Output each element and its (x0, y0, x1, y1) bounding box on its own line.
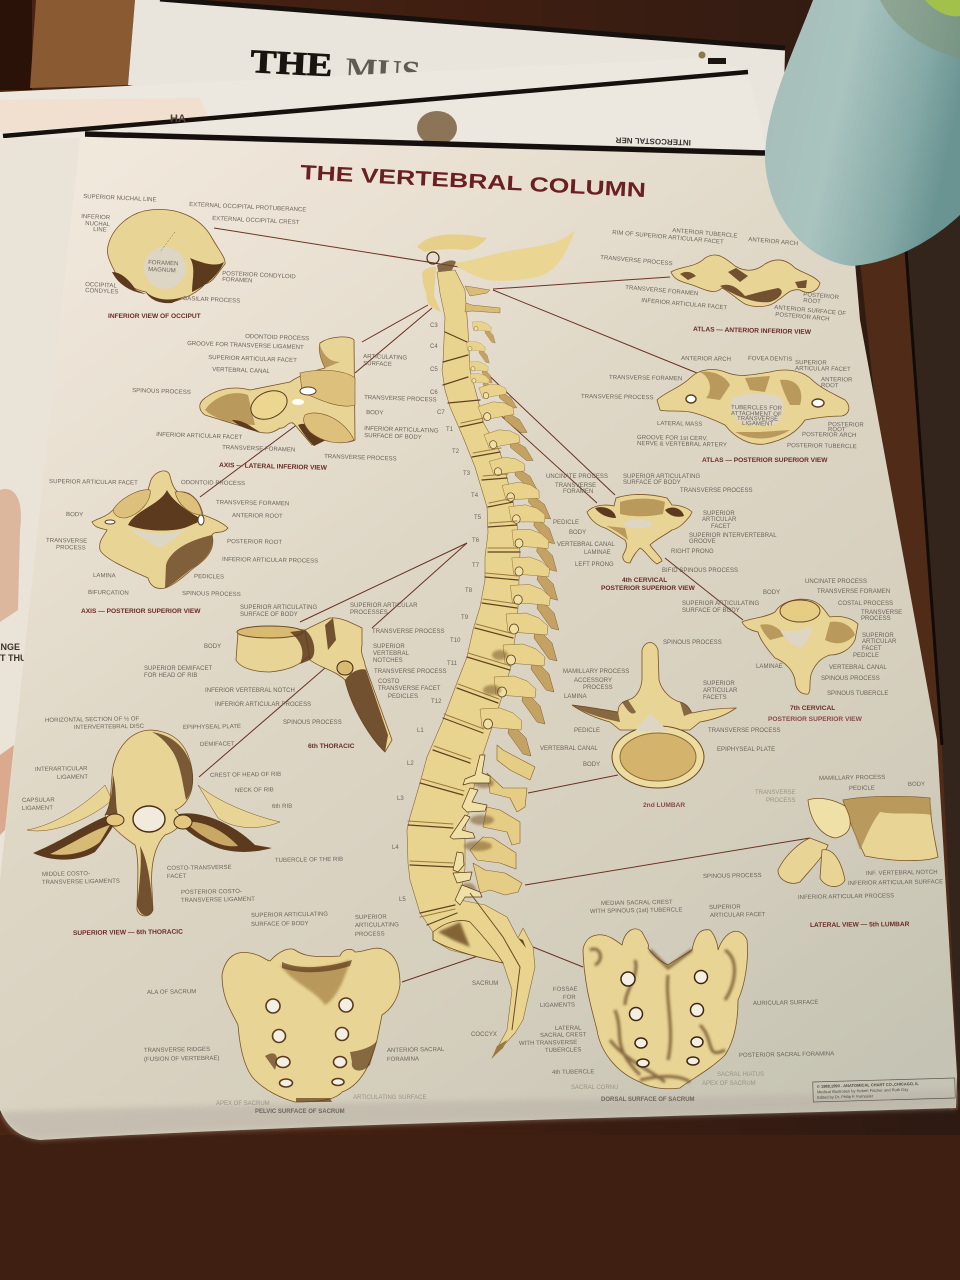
labels: axis posterior: SUPERIOR ARTICULAR FACET (49, 479, 138, 487)
labels: axis lateral: SPINOUS PROCESS (132, 388, 191, 396)
labels: axis lateral: TRANSVERSE FORAMEN (222, 445, 295, 454)
labels: 4th cervical: PEDICLE (553, 520, 579, 526)
labels: 4th cervical: BODY (569, 530, 586, 536)
labels: sacrum pelvic (144, 912, 445, 1063)
labels: axis lateral: VERTEBRAL CANAL (212, 367, 271, 375)
copyright box: Edited by Dr. Philip F. Fornasier (817, 1093, 874, 1100)
labels: axis posterior: PEDICLES (194, 574, 224, 581)
spinal column illustration (407, 230, 575, 1058)
labels: sacrum dorsal: FOR (563, 995, 576, 1001)
labels: sacrum pelvic faint (216, 1095, 426, 1107)
cervical and thoracic processes (465, 286, 559, 756)
labels: sacrum pelvic: ANTERIOR SACRAL (387, 1047, 445, 1054)
labels: occiput: FORAMEN (148, 260, 179, 267)
labels: sacrum pelvic: SURFACE OF BODY (251, 921, 309, 928)
labels: 2nd lumbar: LAMINA (564, 694, 587, 700)
labels: 4th cervical: GROOVE (689, 539, 716, 545)
heading: 7th cervical (768, 705, 863, 723)
labels: 6th thoracic superior: INTERVERTEBRAL DISC (74, 724, 145, 731)
labels: atlas posterior: POSTERIOR ARCH (802, 432, 856, 439)
labels: axis lateral: TRANSVERSE PROCESS (324, 454, 397, 463)
vertebra level labels: T8 (465, 588, 473, 594)
labels: sacrum dorsal faint: APEX OF SACRUM (702, 1081, 756, 1087)
labels: 6th thoracic lateral: FOR HEAD OF RIB (144, 673, 197, 679)
labels: 6th thoracic lateral: SUPERIOR (373, 644, 405, 650)
panel: 6th thoracic lateral (144, 603, 447, 752)
labels: atlas posterior: POSTERIOR (828, 422, 865, 429)
foreground: teal vase (765, 0, 960, 266)
heading: lateral view 5th lumbar: LATERAL VIEW — 5th LUMBAR (810, 921, 910, 929)
labels: 4th cervical: VERTEBRAL CANAL (557, 542, 615, 548)
panel: pelvic surface of sacrum (144, 912, 445, 1115)
heading: 6th thoracic: 6th THORACIC (308, 743, 355, 750)
disc lines (408, 332, 520, 925)
background poster: hand: INTERCOSTAL NER (615, 135, 691, 147)
labels: sacrum pelvic: ARTICULATING (355, 922, 399, 929)
labels: 5th lumbar lateral: INFERIOR ARTICULAR PROCESS (798, 893, 894, 901)
labels: occiput: INFERIOR (81, 214, 111, 221)
labels: occiput: LINE (93, 227, 107, 234)
labels: occiput: FORAMEN (222, 277, 253, 284)
labels: axis lateral: INFERIOR ARTICULATING (364, 426, 439, 435)
labels: axis posterior (46, 479, 318, 598)
labels: 6th thoracic lateral: BODY (204, 644, 221, 650)
labels: 2nd lumbar: FACETS (703, 695, 727, 701)
vertebra level labels: T5 (474, 515, 482, 521)
labels: atlas posterior: NERVE & VERTEBRAL ARTERY (637, 441, 727, 449)
icon: 6th thoracic lateral vertebra (236, 618, 392, 752)
labels: 2nd lumbar: EPIPHYSEAL PLATE (717, 747, 775, 753)
labels: sacrum dorsal: POSTERIOR SACRAL FORAMINA (739, 1051, 834, 1059)
labels: axis posterior: ANTERIOR ROOT (232, 513, 283, 520)
labels: 6th thoracic superior (22, 715, 343, 904)
icon: axis lateral (200, 337, 355, 446)
labels: 7th cervical: LAMINAE (756, 664, 783, 670)
labels: sacrum pelvic: ALA OF SACRUM (147, 989, 196, 996)
labels: axis lateral: INFERIOR ARTICULAR FACET (156, 432, 243, 441)
labels: 7th cervical: UNCINATE PROCESS (805, 579, 867, 585)
background poster: left sheet with hand photo: T THU (0, 653, 26, 663)
vertebra level labels: L2 (407, 761, 414, 767)
background poster: left sheet with hand photo (0, 138, 84, 900)
labels: occiput: OCCIPITAL (85, 282, 118, 290)
labels: atlas anterior: POSTERIOR (803, 292, 840, 301)
heading: superior view 6th thoracic: SUPERIOR VIEW — 6th THORACIC (73, 929, 183, 937)
labels: sacrum dorsal: SUPERIOR (709, 904, 741, 911)
labels: 7th cervical (682, 579, 902, 697)
heading: dorsal surface of sacrum: DORSAL SURFACE OF SACRUM (601, 1097, 695, 1103)
vertebra level labels: T4 (471, 493, 479, 499)
labels: 6th thoracic superior: CREST OF HEAD OF RIB (210, 772, 281, 779)
labels: axis lateral: ODONTOID PROCESS (245, 334, 309, 342)
labels: 5th lumbar lateral: BODY (908, 782, 925, 788)
labels: faint transverse process: PROCESS (766, 798, 795, 804)
background poster: the muscles: THE (250, 44, 333, 84)
labels: sacrum dorsal faint: SACRAL CORNU (571, 1085, 618, 1091)
labels: 6th thoracic lateral: SUPERIOR ARTICULATING (240, 605, 317, 611)
labels: sacrum dorsal: MEDIAN SACRAL CREST (601, 900, 673, 907)
labels: axis lateral: ARTICULATING (363, 354, 408, 362)
labels: 7th cervical: BODY (763, 590, 780, 596)
labels: 6th thoracic lateral: SUPERIOR ARTICULAR (350, 603, 418, 609)
labels: axis lateral: SURFACE OF BODY (364, 433, 422, 441)
column body silhouette (407, 270, 535, 1058)
labels: 6th thoracic superior: LIGAMENT (57, 774, 88, 781)
labels: faint transverse process: TRANSVERSE (755, 790, 796, 796)
labels: 6th thoracic superior: NECK OF RIB (235, 787, 274, 794)
labels: atlas posterior: POSTERIOR TUBERCLE (787, 443, 857, 450)
labels: atlas anterior: POSTERIOR ARCH (775, 312, 830, 323)
labels: 5th lumbar lateral: SPINOUS PROCESS (703, 873, 762, 880)
copyright box: © 1988,1990 - ANATOMICAL CHART CO.,CHICAGO, IL (817, 1081, 919, 1089)
vertebra level labels: C6 (430, 390, 438, 396)
labels: 6th thoracic superior: TRANSVERSE LIGAMENT (181, 897, 255, 904)
vertebra level labels: L5 (399, 897, 406, 903)
labels: 7th cervical: SPINOUS TUBERCLE (827, 691, 888, 697)
labels: 4th cervical: BIFID SPINOUS PROCESS (662, 568, 738, 574)
labels: 2nd lumbar: ACCESSORY (574, 678, 612, 684)
labels: 6th thoracic lateral: TRANSVERSE PROCESS (372, 629, 445, 635)
labels: sacrum dorsal: LIGAMENTS (540, 1002, 575, 1009)
background poster: the muscles: MUS (345, 52, 421, 89)
vertebra level labels: T12 (431, 699, 442, 705)
labels: 2nd lumbar: PROCESS (583, 685, 613, 691)
labels: sacrum pelvic: (FUSION OF VERTEBRAE) (144, 1056, 220, 1063)
labels: axis posterior: BIFURCATION (88, 590, 129, 597)
labels: 2nd lumbar: SUPERIOR (703, 681, 735, 687)
vertebra level labels: T11 (447, 661, 458, 667)
copyright box (813, 1078, 955, 1102)
vertebra level labels: C5 (430, 367, 438, 373)
labels: 2nd lumbar: ARTICULAR (703, 688, 738, 694)
labels: occiput: MAGNUM (148, 267, 176, 274)
labels: 6th thoracic lateral: SUPERIOR DEMIFACET (144, 666, 213, 672)
labels: sacrum pelvic: FORAMINA (387, 1056, 419, 1063)
heading: 4th cervical: POSTERIOR SUPERIOR VIEW (601, 585, 696, 592)
panel: axis lateral inferior view (132, 334, 439, 472)
labels: 7th cervical: SURFACE OF BODY (682, 608, 740, 614)
labels: atlas posterior: TRANSVERSE FORAMEN (609, 375, 682, 382)
labels: atlas posterior: GROOVE FOR 1st CERV. (637, 435, 708, 442)
labels: atlas anterior: RIM OF SUPERIOR ARTICULAR FACET (612, 230, 724, 246)
panel: superior view 6th thoracic (22, 715, 343, 937)
labels: 6th thoracic lateral: PROCESSES (350, 610, 388, 616)
background poster: the muscles (128, 0, 785, 270)
labels: atlas posterior: TRANSVERSE PROCESS (581, 394, 654, 401)
labels: sacrum dorsal: FOSSAE (553, 987, 578, 993)
labels: occiput: BASILAR PROCESS (183, 296, 240, 305)
heading: inferior view of occiput: INFERIOR VIEW OF OCCIPUT (108, 313, 201, 320)
labels: 6th thoracic superior: LIGAMENT (22, 805, 53, 812)
labels: 7th cervical: FACET (862, 646, 882, 652)
labels: 7th cervical: ARTICULAR (862, 639, 897, 645)
heading: 7th cervical: POSTERIOR SUPERIOR VIEW (768, 716, 863, 723)
labels: atlas posterior (581, 356, 865, 450)
icon: 7th cervical vertebra (742, 599, 858, 694)
labels: 2nd lumbar: PEDICLE (574, 728, 600, 734)
lumbar articular processes (450, 755, 490, 905)
lumbar arch shading (460, 650, 508, 897)
labels: atlas posterior: TUBERCLES FOR (731, 405, 783, 412)
labels: 2nd lumbar (540, 640, 781, 768)
labels: atlas posterior: ANTERIOR (821, 377, 853, 384)
icon: atlas anterior (671, 255, 820, 307)
labels: sacrum dorsal: ARTICULAR FACET (710, 912, 766, 919)
labels: occiput: NUCHAL (85, 221, 111, 228)
labels: 6th thoracic lateral: INFERIOR ARTICULAR PROCESS (215, 702, 311, 708)
vertebra level labels: C7 (437, 410, 445, 416)
labels: 2nd lumbar: BODY (583, 762, 600, 768)
labels: 6th thoracic lateral: COSTO (378, 679, 400, 685)
labels: axis posterior: TRANSVERSE FORAMEN (216, 500, 289, 507)
labels: atlas posterior: LATERAL MASS (657, 421, 702, 428)
labels: 4th cervical: SURFACE OF BODY (623, 480, 681, 486)
labels: axis posterior: INFERIOR ARTICULAR PROCESS (222, 557, 318, 565)
labels: occiput: EXTERNAL OCCIPITAL CREST (212, 216, 300, 226)
labels: 6th thoracic lateral: TRANSVERSE FACET (378, 686, 441, 692)
labels: 7th cervical: PEDICLE (853, 653, 879, 659)
labels: atlas anterior: ANTERIOR SURFACE OF (774, 305, 846, 317)
labels: 7th cervical: COSTAL PROCESS (838, 601, 893, 607)
labels: 4th cervical: TRANSVERSE (555, 483, 596, 489)
labels: 4th cervical: TRANSVERSE PROCESS (680, 488, 753, 494)
labels: 6th thoracic lateral: SURFACE OF BODY (240, 612, 298, 618)
labels: 6th thoracic superior: COSTO-TRANSVERSE (167, 865, 232, 872)
labels: occiput: CONDYLES (85, 288, 119, 296)
labels: axis posterior: SPINOUS PROCESS (182, 591, 241, 598)
panel: dorsal surface of sacrum (519, 900, 834, 1103)
labels: sacrum pelvic: SUPERIOR (355, 914, 387, 921)
labels: 4th cervical: SUPERIOR ARTICULATING (623, 474, 700, 480)
labels: 7th cervical: TRANSVERSE (861, 610, 902, 616)
panel: atlas posterior superior view (581, 356, 865, 464)
labels: axis lateral: SUPERIOR ARTICULAR FACET (208, 355, 297, 364)
labels: 2nd lumbar: VERTEBRAL CANAL (540, 746, 598, 752)
vertebra level labels: T10 (450, 638, 461, 644)
labels: 6th thoracic superior: INTERARTICULAR (35, 766, 88, 773)
labels: 6th thoracic superior: 6th RIB (272, 804, 292, 810)
labels: atlas posterior: FOVEA DENTIS (748, 356, 792, 363)
icon: sacrum pelvic (222, 948, 400, 1102)
icon: 2nd lumbar vertebra (572, 642, 736, 788)
labels: axis lateral (132, 334, 439, 463)
labels: 6th thoracic superior: HORIZONTAL SECTION OF ½ OF (45, 715, 140, 724)
labels: 5th lumbar lateral (703, 775, 943, 901)
labels: sacrum dorsal (519, 900, 834, 1076)
labels: sacrum dorsal: WITH TRANSVERSE (519, 1040, 577, 1047)
vertebra level labels: T6 (472, 538, 480, 544)
labels: axis posterior: LAMINA (93, 573, 116, 579)
labels: 4th cervical: ARTICULAR (702, 517, 737, 523)
labels: 6th thoracic lateral: PEDICLES (388, 694, 418, 700)
labels: 6th thoracic superior: CAPSULAR (22, 797, 55, 804)
heading: axis lateral: AXIS — LATERAL INFERIOR VIEW (219, 462, 328, 472)
labels: axis posterior: TRANSVERSE (46, 538, 87, 545)
labels: 4th cervical (546, 474, 777, 574)
panel: inferior view of occiput (81, 194, 307, 320)
labels: axis lateral: GROOVE FOR TRANSVERSE LIGAMENT (187, 341, 304, 351)
labels: 6th thoracic superior: FACET (167, 874, 187, 880)
heading: pelvic surface of sacrum: PELVIC SURFACE OF SACRUM (255, 1109, 345, 1115)
labels: axis posterior: PROCESS (56, 545, 86, 552)
labels: sacrum dorsal: 4th TUBERCLE (552, 1069, 595, 1076)
labels: axis posterior: POSTERIOR ROOT (227, 539, 282, 546)
labels: 6th thoracic lateral: VERTEBRAL (373, 651, 410, 657)
labels: atlas anterior: TRANSVERSE FORAMEN (625, 285, 698, 297)
labels: 6th thoracic superior: POSTERIOR COSTO- (181, 889, 242, 896)
labels: atlas anterior: ANTERIOR ARCH (748, 237, 798, 247)
labels: 2nd lumbar: TRANSVERSE PROCESS (708, 728, 781, 734)
vertebra level labels: SACRUM (472, 981, 498, 987)
panel: atlas anterior inferior view (600, 228, 846, 336)
vertebra level labels: T1 (446, 427, 454, 433)
labels: 4th cervical: FACET (711, 524, 731, 530)
labels: atlas posterior: ATTACHMENT OF (731, 411, 782, 418)
icon: occiput bone (107, 209, 225, 303)
icon: sacrum dorsal (583, 929, 748, 1089)
sacrum and coccyx detail (433, 893, 526, 1058)
labels: sacrum pelvic: PROCESS (355, 931, 385, 938)
icon: 4th cervical vertebra (587, 495, 692, 564)
labels: 4th cervical: SUPERIOR INTERVERTEBRAL (689, 533, 777, 539)
labels: atlas posterior: ROOT (821, 383, 839, 389)
labels: atlas posterior: TRANSVERSE (737, 416, 778, 423)
labels: sacrum dorsal: SACRAL CREST (540, 1032, 587, 1039)
labels: axis lateral: BODY (366, 410, 383, 417)
background poster: hand: HA (170, 113, 186, 125)
labels: sacrum pelvic faint: APEX OF SACRUM (216, 1101, 270, 1107)
labels: atlas posterior: ROOT (828, 427, 846, 433)
labels: 6th thoracic lateral: TRANSVERSE PROCESS (374, 669, 447, 675)
labels: occiput: POSTERIOR CONDYLOID (222, 271, 296, 280)
heading: 4th cervical: 4th CERVICAL (622, 577, 667, 584)
labels: atlas anterior: INFERIOR ARTICULAR FACET (641, 298, 728, 312)
vertebra level labels: T3 (463, 471, 471, 477)
vertebra level labels: COCCYX (471, 1032, 497, 1038)
heading: axis posterior: AXIS — POSTERIOR SUPERIOR VIEW (81, 608, 201, 615)
main poster sheet (0, 134, 957, 1140)
panel: 2nd lumbar (540, 640, 781, 809)
heading: atlas anterior: ATLAS — ANTERIOR INFERIOR VIEW (693, 326, 812, 336)
labels: atlas posterior: SUPERIOR (795, 360, 827, 367)
labels: 7th cervical: PROCESS (861, 616, 891, 622)
labels: 4th cervical: SUPERIOR (703, 511, 735, 517)
labels: 7th cervical: SPINOUS PROCESS (821, 676, 880, 682)
labels: occiput: SUPERIOR NUCHAL LINE (83, 194, 157, 203)
labels: 6th thoracic superior: TRANSVERSE LIGAMENTS (42, 879, 120, 886)
icon: 6th thoracic superior vertebra with ribs (27, 730, 280, 916)
title: THE VERTEBRAL COLUMN (300, 161, 646, 202)
panel: axis posterior superior view (46, 471, 318, 615)
vertebra level labels (392, 323, 498, 1038)
vertebra level labels: L4 (392, 845, 399, 851)
icon: atlas posterior (657, 370, 849, 444)
labels: 5th lumbar lateral: INFERIOR ARTICULAR SURFACE (848, 879, 943, 887)
labels: 5th lumbar lateral: MAMILLARY PROCESS (819, 775, 885, 782)
labels: 4th cervical: UNCINATE PROCESS (546, 474, 608, 480)
labels: 2nd lumbar: MAMILLARY PROCESS (563, 669, 629, 675)
labels: 6th thoracic superior: MIDDLE COSTO- (42, 871, 90, 878)
labels: 6th thoracic lateral (144, 603, 447, 726)
heading: 4th cervical (601, 577, 696, 592)
labels: sacrum dorsal: TUBERCLES (545, 1047, 581, 1054)
labels: 6th thoracic lateral: INFERIOR VERTEBRAL NOTCH (205, 688, 295, 694)
heading: 2nd lumbar: 2nd LUMBAR (643, 802, 685, 809)
labels: occiput (81, 194, 307, 305)
heading: 7th cervical: 7th CERVICAL (790, 705, 835, 712)
labels: atlas anterior: TRANSVERSE PROCESS (600, 255, 673, 267)
labels: faint transverse process (755, 790, 796, 804)
labels: atlas anterior: ANTERIOR TUBERCLE (672, 228, 738, 240)
labels: 2nd lumbar: SPINOUS PROCESS (663, 640, 722, 646)
labels: 4th cervical: RIGHT PRONG (671, 549, 714, 555)
vertebra level labels: T9 (461, 615, 469, 621)
labels: atlas anterior: ROOT (803, 298, 821, 306)
copyright box: Medical Illustration by Hobert Fischer and Ruth Day (817, 1087, 908, 1094)
labels: 6th thoracic lateral: SPINOUS PROCESS (283, 720, 342, 726)
labels: 6th thoracic superior: TUBERCLE OF THE RIB (275, 857, 343, 864)
labels: 5th lumbar lateral: PEDICLE (849, 786, 875, 792)
labels: 7th cervical: TRANSVERSE FORAMEN (817, 589, 890, 595)
vertebra level labels: T7 (472, 563, 480, 569)
labels: axis posterior: ODONTOID PROCESS (181, 480, 245, 487)
skull base fragment (417, 230, 575, 312)
labels: 7th cervical: SUPERIOR ARTICULATING (682, 601, 759, 607)
panel: 4th cervical (546, 474, 777, 592)
labels: axis lateral: TRANSVERSE PROCESS (364, 395, 437, 404)
vertebra level labels: L1 (417, 728, 424, 734)
connector lines from spine to detail views (199, 228, 810, 982)
labels: 4th cervical: FORAMEN (563, 489, 593, 495)
labels: 4th cervical: LEFT PRONG (575, 562, 614, 568)
labels: sacrum dorsal faint: SACRAL HIATUS (717, 1072, 764, 1078)
labels: 6th thoracic superior: DEMIFACET (200, 741, 235, 748)
labels: 7th cervical: SUPERIOR (862, 633, 894, 639)
labels: axis posterior: BODY (66, 512, 83, 518)
labels: sacrum dorsal faint (571, 1072, 764, 1091)
panel: lateral view 5th lumbar (703, 775, 943, 929)
labels: 5th lumbar lateral: INF. VERTEBRAL NOTCH (866, 870, 938, 877)
vertebra level labels: C3 (430, 323, 438, 329)
labels: sacrum dorsal: LATERAL (555, 1026, 582, 1032)
background poster: hand (0, 52, 768, 155)
labels: 6th thoracic lateral: NOTCHES (373, 658, 403, 664)
labels: occiput: EXTERNAL OCCIPITAL PROTUBERANCE (189, 202, 307, 214)
labels: 4th cervical: LAMINAE (584, 550, 611, 556)
heading: atlas posterior: ATLAS — POSTERIOR SUPERIOR VIEW (702, 457, 828, 464)
panel: 7th cervical (682, 579, 902, 723)
vertebra level labels: L3 (397, 796, 404, 802)
labels: 7th cervical: VERTEBRAL CANAL (829, 665, 887, 671)
labels: atlas posterior: ANTERIOR ARCH (681, 356, 731, 363)
labels: sacrum pelvic faint: ARTICULATING SURFACE (353, 1095, 426, 1101)
labels: sacrum pelvic: TRANSVERSE RIDGES (144, 1047, 210, 1054)
labels: atlas posterior: ARTICULAR FACET (795, 366, 851, 373)
lumbar spinous processes (470, 745, 535, 895)
vertebra level labels: C4 (430, 344, 438, 350)
labels: sacrum dorsal: AURICULAR SURFACE (753, 1000, 819, 1007)
icon: axis posterior (92, 471, 228, 588)
labels: atlas posterior: LIGAMENT (742, 421, 773, 428)
labels: sacrum dorsal: WITH SPINOUS (1st) TUBERCLE (590, 907, 683, 915)
labels: axis lateral: SURFACE (363, 361, 392, 368)
vertebra level labels: T2 (452, 449, 460, 455)
labels: 6th thoracic superior: EPIPHYSEAL PLATE (183, 724, 241, 731)
labels: sacrum pelvic: SUPERIOR ARTICULATING (251, 912, 328, 919)
icon: 5th lumbar lateral (778, 796, 938, 887)
labels: atlas anterior (600, 228, 846, 323)
